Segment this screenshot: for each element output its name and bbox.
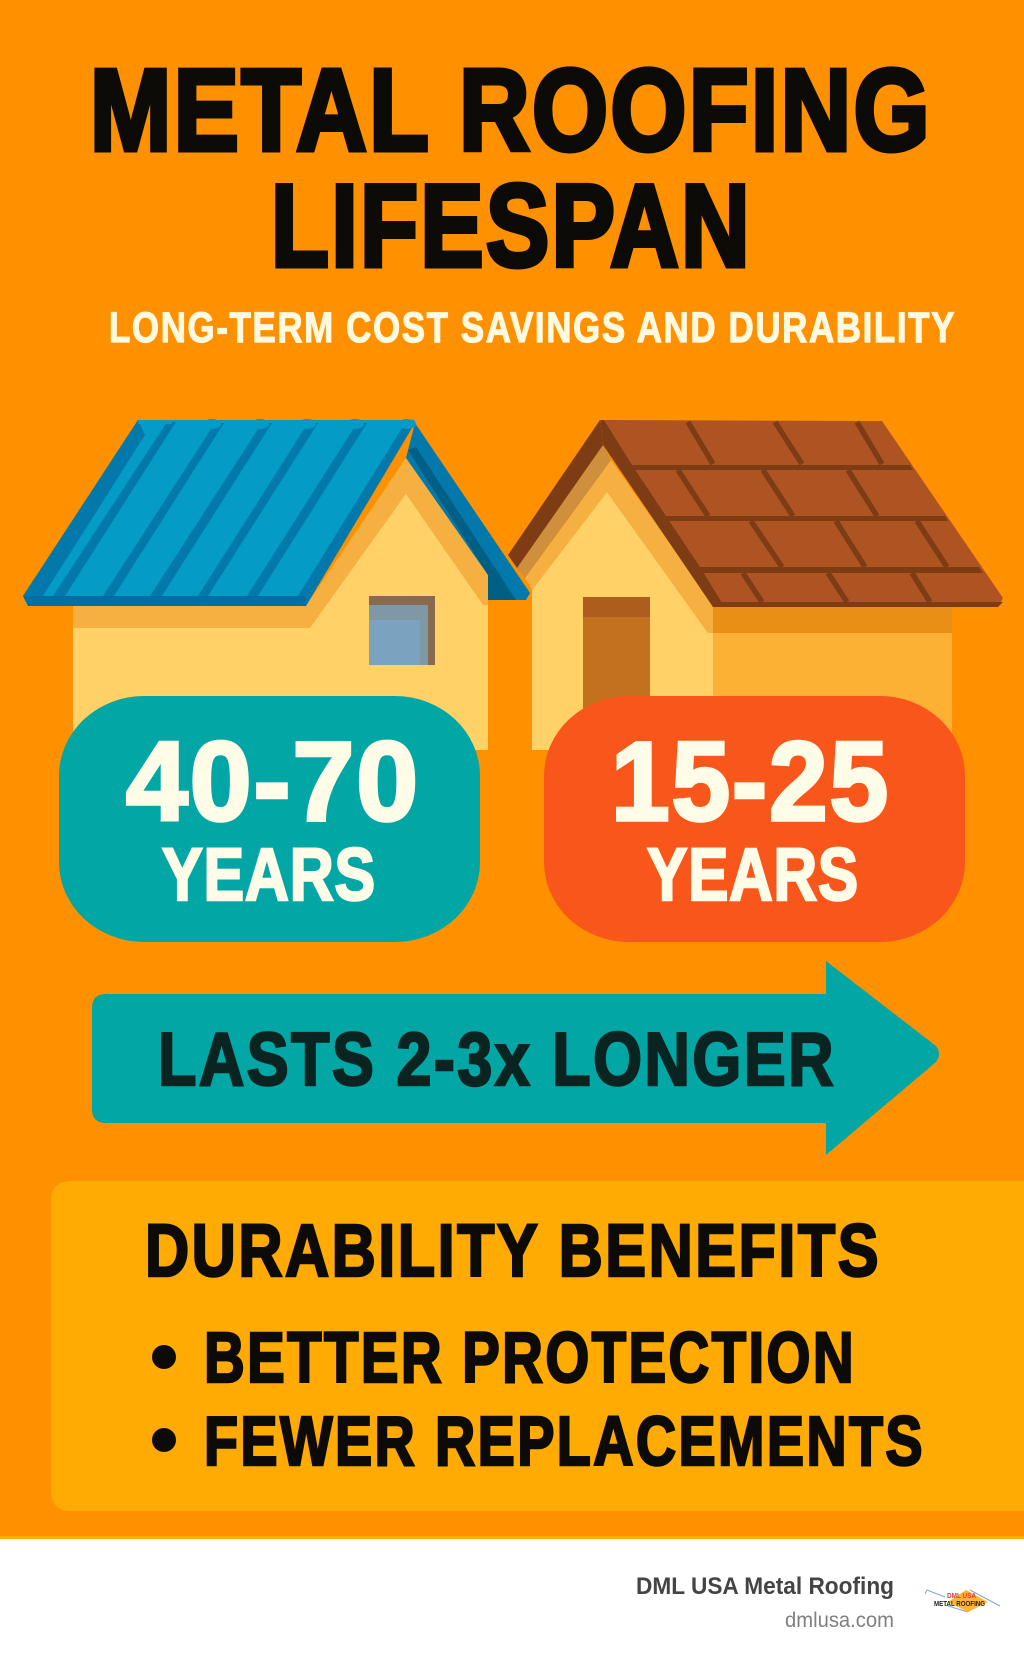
footer url: dmlusa.com	[785, 1609, 894, 1632]
wall: front	[532, 492, 713, 750]
icon: company logo: METAL ROOFING	[934, 1601, 985, 1608]
badge: shingle 15-25 years: YEARS	[647, 833, 859, 916]
shingle roof	[508, 420, 1003, 607]
badge: metal 40-70 years	[59, 696, 480, 942]
door	[583, 597, 650, 750]
wall: side	[713, 607, 952, 750]
panel heading: DURABILITY BENEFITS	[145, 1209, 881, 1292]
title	[90, 45, 932, 291]
wall: metal roof house	[73, 458, 488, 750]
footer brand name: DML USA Metal Roofing	[636, 1573, 894, 1600]
wall: side shadow	[713, 607, 952, 633]
icon: company logo	[925, 1590, 1000, 1612]
panel: durability benefits	[51, 1181, 1024, 1511]
gable shadow	[525, 460, 713, 633]
title: LIFESPAN	[271, 160, 752, 291]
bullet: better protection: BETTER PROTECTION	[204, 1319, 856, 1398]
house illustration: metal roof	[23, 419, 530, 750]
arrow: lasts longer: LASTS 2-3x LONGER	[158, 1017, 836, 1101]
wall shadow	[73, 458, 488, 628]
metal roof	[23, 419, 530, 606]
badge: metal 40-70 years: YEARS	[162, 833, 376, 916]
window	[369, 596, 435, 665]
icon: company logo: DML USA	[947, 1593, 976, 1600]
house illustration: shingle roof	[508, 420, 1003, 750]
badge: shingle 15-25 years	[544, 696, 965, 942]
badge: shingle 15-25 years: 15-25	[611, 719, 890, 844]
arrow: lasts longer	[92, 961, 939, 1155]
badge: metal 40-70 years: 40-70	[126, 719, 420, 844]
